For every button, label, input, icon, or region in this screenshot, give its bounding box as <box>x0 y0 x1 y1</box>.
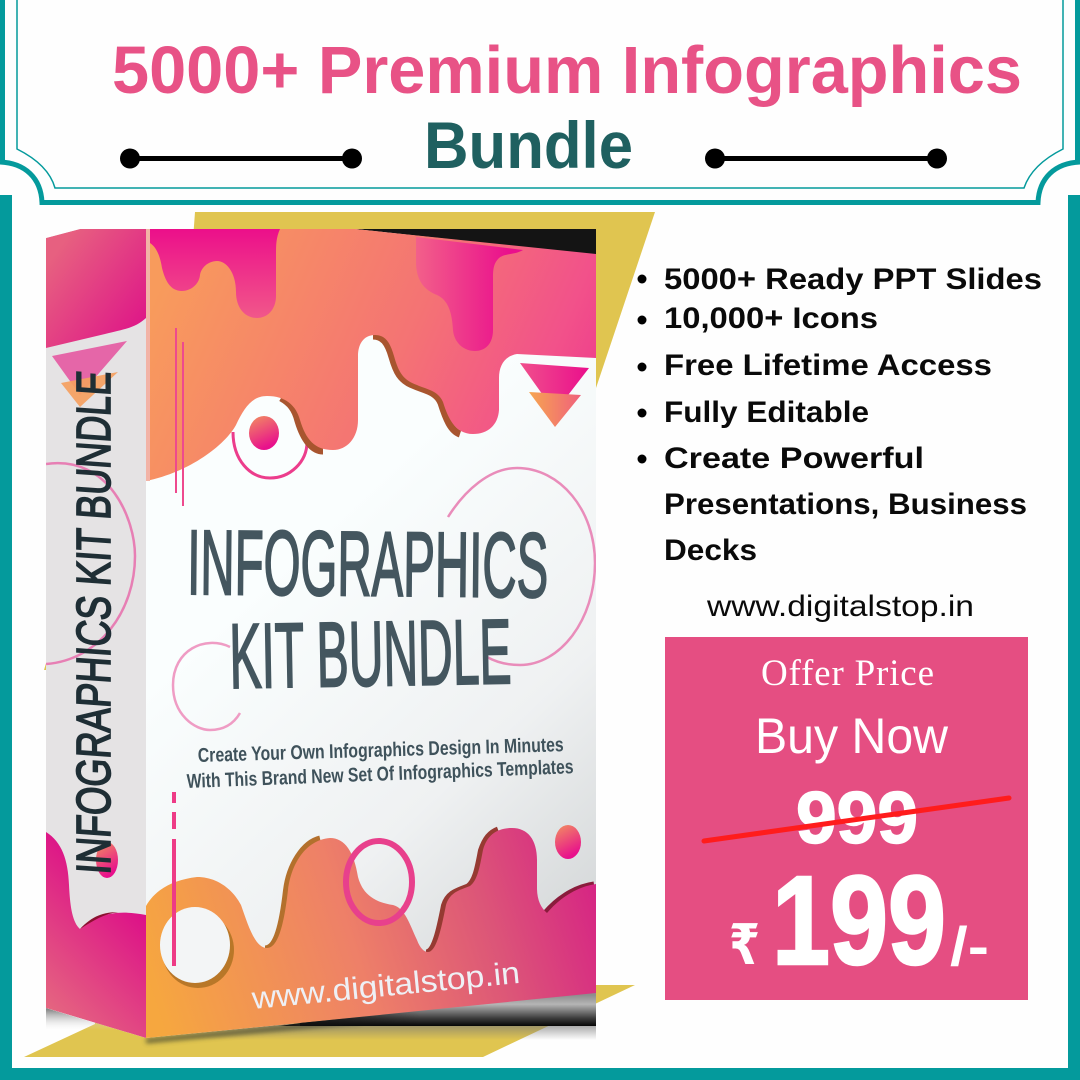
right title divider <box>705 148 947 168</box>
feature list: Free Lifetime Access <box>664 349 992 382</box>
left title divider <box>120 148 362 168</box>
top wave shadow <box>281 336 460 451</box>
dashed accent line <box>172 792 176 966</box>
offer price value: 199 <box>772 850 946 991</box>
box front face <box>146 229 596 1040</box>
buy now label: Buy Now <box>755 708 949 764</box>
yellow backdrop bottom <box>24 985 635 1057</box>
title: 5000+ Premium Infographics <box>112 33 1022 108</box>
bottom wave <box>146 828 596 1040</box>
small arc <box>173 643 240 730</box>
bottom circle shadow <box>164 923 234 988</box>
box title line 1: INFOGRAPHICS <box>187 512 549 617</box>
box subtitle: With This Brand New Set Of Infographics Templates <box>186 756 574 793</box>
pink dot <box>555 825 581 859</box>
bottom wave shadow <box>265 830 594 952</box>
black top corner <box>355 229 596 255</box>
product box <box>46 229 596 1042</box>
price panel <box>665 637 1028 1000</box>
top left drip <box>150 229 280 318</box>
strikethrough <box>704 798 1009 841</box>
yellow backdrop sliver <box>44 660 47 670</box>
vertical accent lines <box>175 328 184 506</box>
rupee symbol: ₹ <box>729 913 760 976</box>
top right drip <box>416 237 523 351</box>
box side label: INFOGRAPHICS KIT BUNDLE <box>68 369 121 876</box>
box website: www.digitalstop.in <box>249 955 521 1016</box>
feature list <box>638 263 1042 567</box>
offer price label: Offer Price <box>761 653 934 694</box>
triangle pair <box>520 363 589 427</box>
large arc <box>448 468 595 665</box>
header frame <box>0 0 1080 202</box>
per unit suffix: /- <box>950 915 989 977</box>
feature list: 10,000+ Icons <box>664 302 878 335</box>
feature bullets <box>638 274 646 464</box>
egg dot <box>249 416 279 450</box>
feature list: Create Powerful <box>664 442 924 475</box>
egg ring <box>233 432 307 478</box>
box subtitle <box>186 738 573 788</box>
box edge highlight <box>146 229 150 481</box>
title <box>112 33 1022 182</box>
website link: www.digitalstop.in <box>706 590 974 623</box>
title: Bundle <box>424 108 633 182</box>
box side face <box>46 229 146 1039</box>
bottom curl <box>280 993 596 1026</box>
pink ring <box>346 841 412 923</box>
box title line 2: KIT BUNDLE <box>229 601 512 708</box>
box shadow <box>46 1008 596 1042</box>
old price: 999 <box>796 778 918 859</box>
bottom circle <box>160 907 230 983</box>
feature list: Decks <box>664 534 757 567</box>
top wave <box>146 229 596 481</box>
box subtitle: Create Your Own Infographics Design In Minutes <box>197 734 564 767</box>
feature list: 5000+ Ready PPT Slides <box>664 263 1042 296</box>
feature list: Fully Editable <box>664 396 869 429</box>
yellow backdrop top <box>180 212 655 420</box>
feature list: Presentations, Business <box>664 488 1027 521</box>
